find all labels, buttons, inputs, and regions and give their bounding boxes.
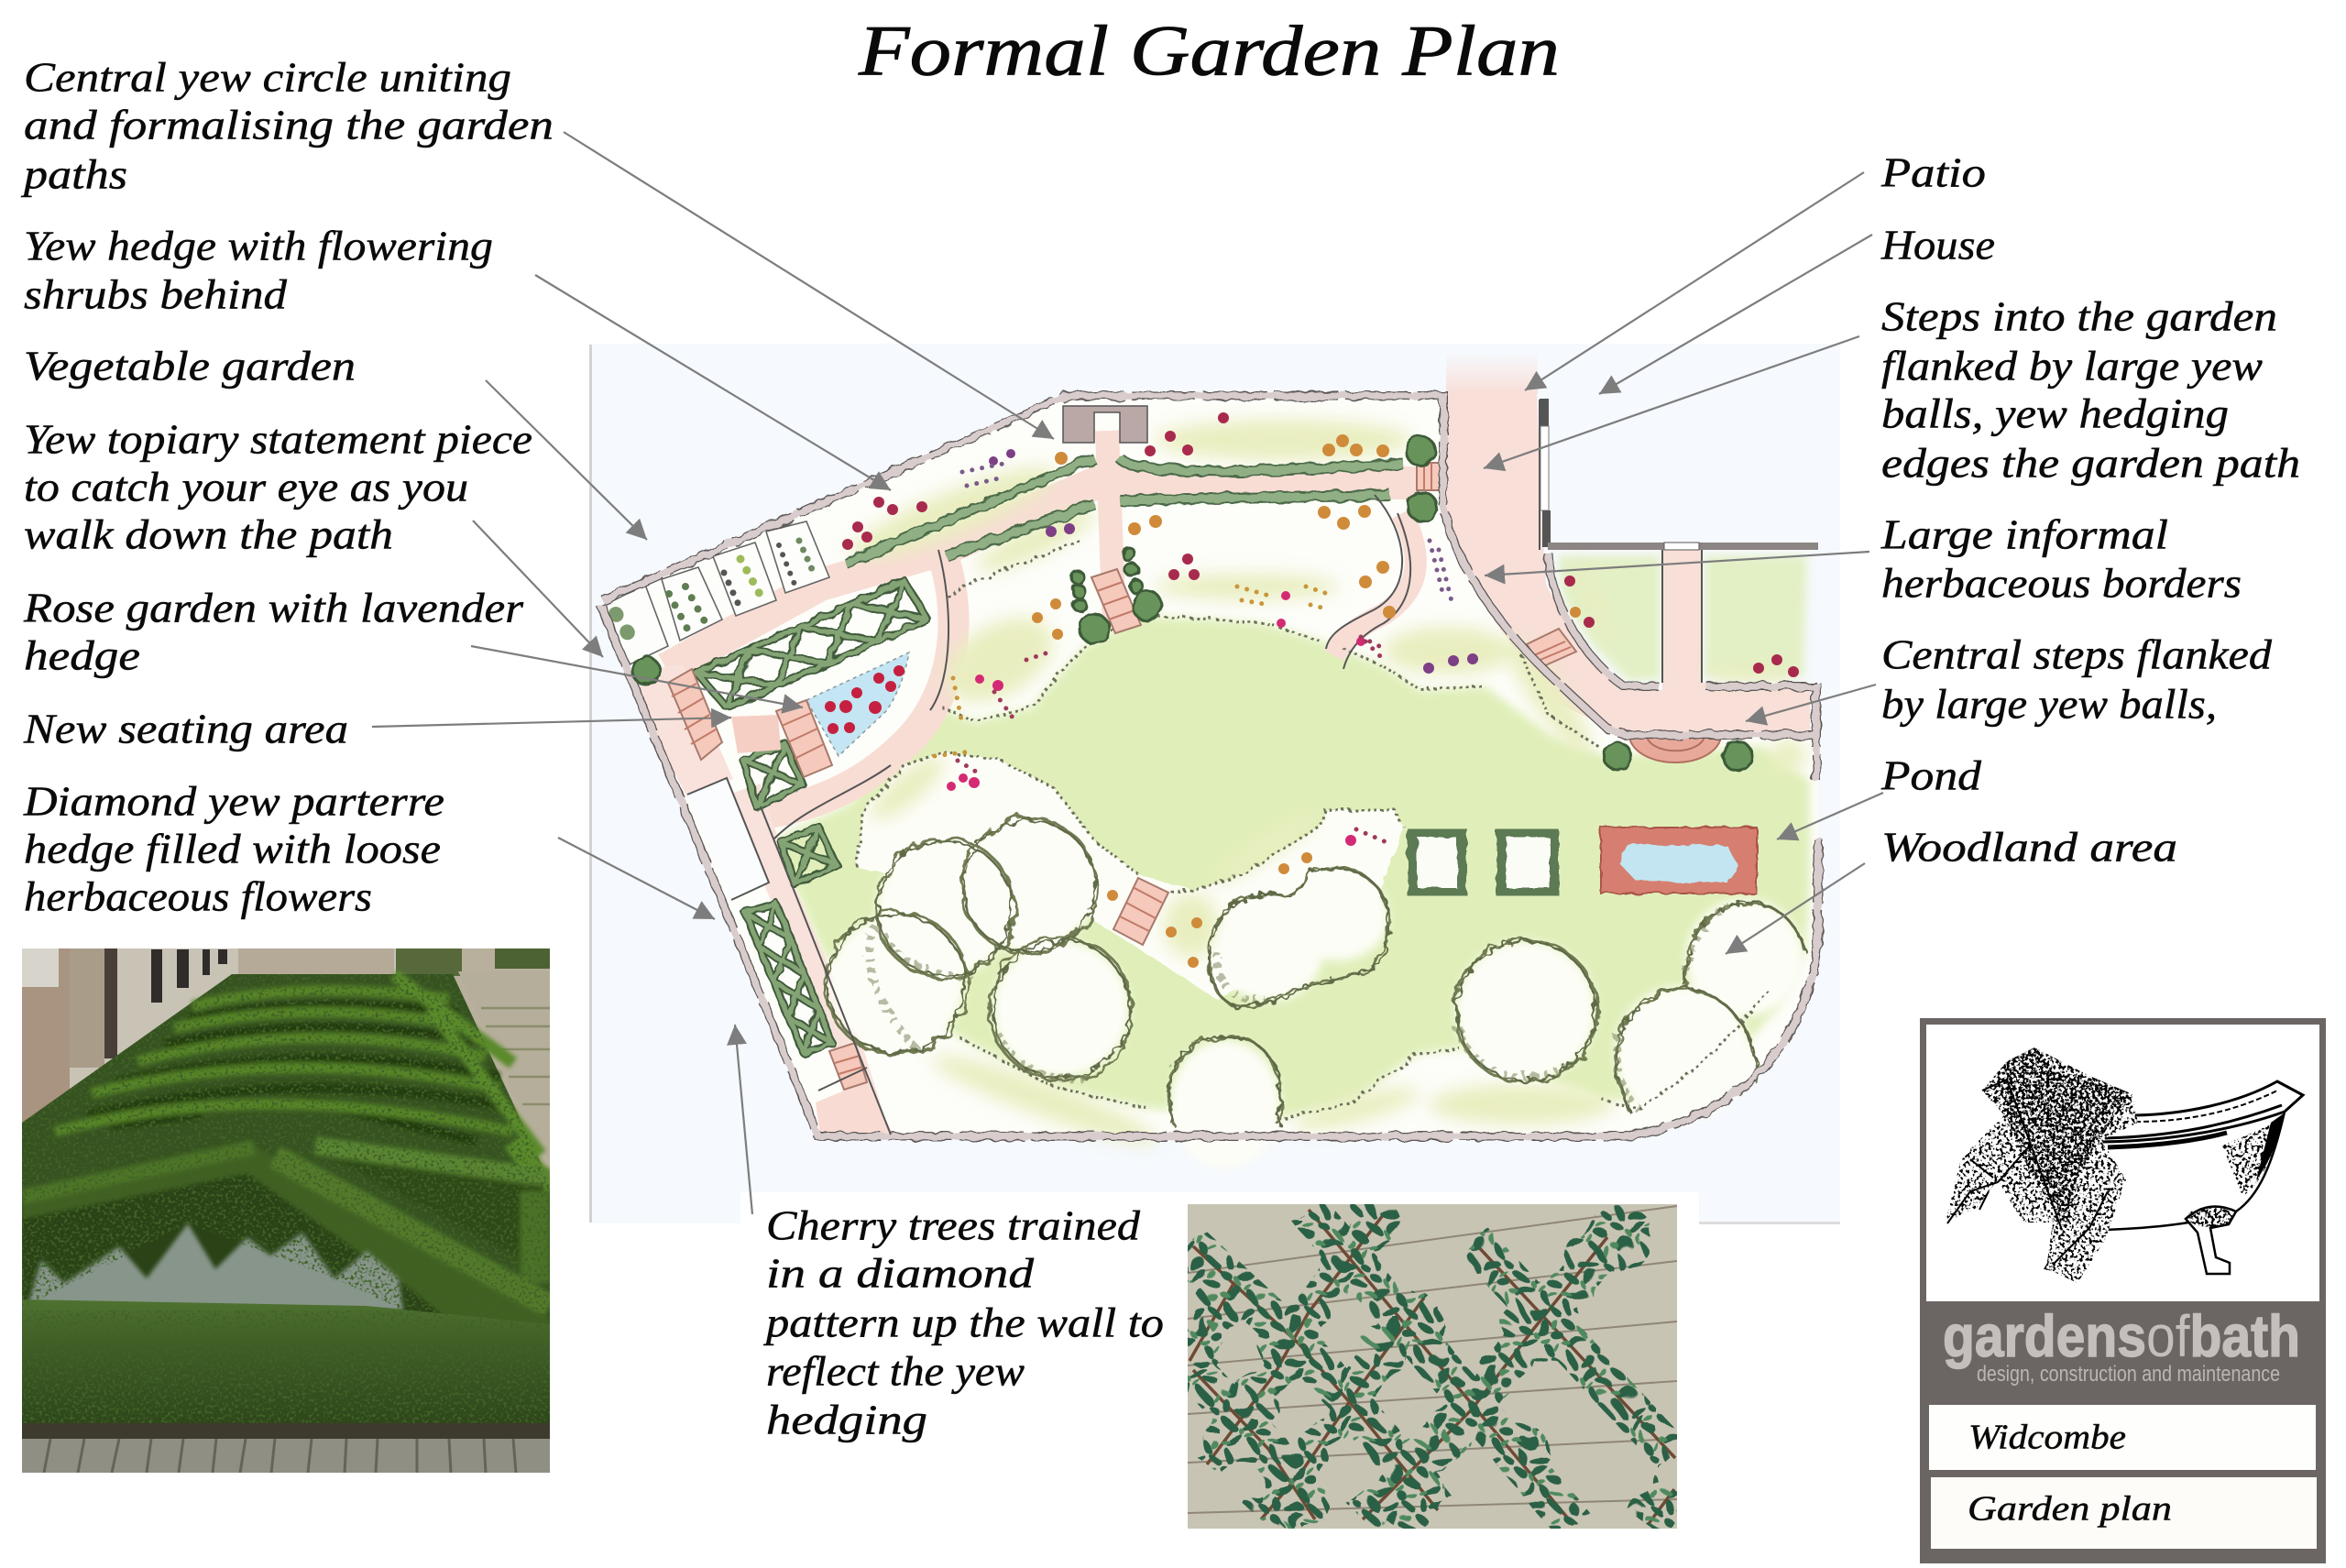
woodland trees <box>828 820 1803 1168</box>
building wall <box>70 948 396 1089</box>
text block: rose garden: Rose garden with lavender <box>23 585 524 630</box>
paving <box>458 971 462 976</box>
text block: yew topiary: Yew topiary statement piece <box>24 416 532 462</box>
text block: rose garden: hedge <box>24 632 140 678</box>
service yard <box>687 778 769 900</box>
paper background <box>590 344 1840 1223</box>
garden steps <box>668 463 1576 1090</box>
arrow: central steps <box>1746 685 1876 721</box>
text block: central steps: Central steps flanked <box>1881 630 2273 678</box>
pale planting fuzz <box>843 420 1805 1156</box>
text block: diamond yew parterre: herbaceous flowers <box>24 872 372 920</box>
pond <box>1601 828 1757 894</box>
arrow: steps into the garden <box>1484 336 1859 468</box>
photo: trained cherry trees on wall <box>1177 1198 1677 1530</box>
arrow: diamond parterre <box>558 838 715 919</box>
text block: large informal borders <box>1880 511 2242 607</box>
hedge mass <box>22 974 550 1324</box>
text block: steps into the garden: flanked by large yew <box>1881 343 2263 389</box>
yew hedges along paths <box>846 458 1403 564</box>
text block: central steps: by large yew balls, <box>1881 680 2217 728</box>
text block: steps into the garden: Steps into the garden <box>1881 293 2277 339</box>
arrow: cherry trees <box>735 1025 752 1214</box>
courtyard lawn <box>1558 555 1807 680</box>
panel: garden plan drawing <box>589 344 1840 1224</box>
panel: Gardens of Bath title block <box>1920 1018 2326 1563</box>
drawing title box: Garden plan <box>1968 1490 2172 1529</box>
arrow: central yew circle <box>564 132 1054 439</box>
arrow: house <box>1599 235 1872 394</box>
text block: yew topiary <box>24 416 532 557</box>
text block: diamond yew parterre <box>23 777 444 920</box>
hedge leaf speckle <box>22 974 550 1430</box>
west paving <box>623 664 733 797</box>
arrow: yew topiary <box>473 521 603 657</box>
patio and terrace paving <box>1446 353 1810 732</box>
bath rim <box>2101 1081 2303 1142</box>
rose garden bed <box>806 652 909 756</box>
text block: central yew circle: Central yew circle uniting <box>24 53 511 101</box>
text block: patio: Patio <box>1880 148 1986 196</box>
front hedge <box>22 1299 550 1430</box>
text block: cherry trees: Cherry trees trained <box>766 1202 1141 1248</box>
arrow: large informal borders <box>1485 552 1869 576</box>
text block: large informal borders: Large informal <box>1880 511 2168 557</box>
title: Formal Garden Plan <box>858 11 1560 90</box>
central semicircular steps <box>1629 735 1721 762</box>
arrow: patio <box>1525 172 1864 390</box>
trailing foliage <box>1946 1047 2138 1283</box>
text block: house: House <box>1880 222 1995 268</box>
text block: yew hedge: Yew hedge with flowering <box>24 222 493 269</box>
logo strapline: design, construction and maintenance <box>1977 1362 2280 1387</box>
text block: central yew circle: and formalising the garden <box>24 101 554 148</box>
tree canopy outlines <box>825 818 1807 1125</box>
diamond yew parterres <box>696 581 927 1053</box>
icon: bath with plants <box>1946 1047 2303 1283</box>
soil and cobbles <box>22 1423 550 1439</box>
arrow: rose garden <box>471 646 803 707</box>
hedge chevrons <box>55 975 550 1191</box>
new seating area <box>731 715 781 753</box>
text block: rose garden <box>23 585 524 678</box>
text block: new seating area: New seating area <box>23 706 348 751</box>
lavender planting <box>27 1223 403 1310</box>
photo: knot garden parterre <box>22 948 550 1473</box>
summerhouse at top of path <box>1063 406 1147 443</box>
planting bed scribbled edges <box>858 541 1769 1119</box>
vegetable garden beds <box>603 521 829 667</box>
gate and path edges <box>687 400 1702 1135</box>
text block: steps into the garden: edges the garden path <box>1881 440 2300 486</box>
project name box <box>1929 1405 2316 1470</box>
yew balls <box>632 436 1752 771</box>
text block: cherry trees: hedging <box>766 1397 927 1442</box>
south-west paving <box>816 1081 893 1136</box>
logo wordmark: gardensofbath <box>1943 1303 2300 1369</box>
project name box: Widcombe <box>1968 1419 2126 1457</box>
text block: yew topiary: walk down the path <box>24 511 393 557</box>
weatherboard lines <box>1188 1206 1677 1513</box>
arrow: new seating area <box>372 718 731 727</box>
garden walls <box>601 396 1818 1136</box>
main triangular hedge <box>22 1135 550 1323</box>
text block: central steps <box>1881 630 2273 728</box>
text block: pond: Pond <box>1880 751 1982 799</box>
arrow: yew hedge <box>535 275 891 490</box>
text block: steps into the garden <box>1881 293 2300 486</box>
text block: vegetable garden: Vegetable garden <box>24 343 356 389</box>
arrow: vegetable garden <box>486 380 647 540</box>
garden interior <box>601 396 1818 1139</box>
leaf bands <box>1189 1210 1675 1525</box>
ivy strands <box>1947 1080 2108 1265</box>
text block: large informal borders: herbaceous borders <box>1881 559 2242 607</box>
text block: central yew circle: paths <box>21 150 127 198</box>
text block: yew hedge: shrubs behind <box>24 271 288 317</box>
left claw foot <box>2045 1255 2080 1272</box>
square clipped hedges <box>1412 832 1554 893</box>
text block: cherry trees: in a diamond <box>766 1250 1035 1296</box>
bath body <box>2101 1112 2285 1230</box>
drawing title box <box>1931 1477 2317 1549</box>
house wall <box>1540 399 1818 550</box>
text block: diamond yew parterre: Diamond yew parterre <box>23 777 444 825</box>
right claw foot <box>2186 1207 2236 1274</box>
text block: diamond yew parterre: hedge filled with loose <box>24 825 441 872</box>
text block: woodland area: Woodland area <box>1881 823 2177 871</box>
text block: cherry trees <box>763 1202 1164 1442</box>
denser leaf groups at crossings <box>1177 1198 1653 1530</box>
arrow: woodland area <box>1726 863 1865 954</box>
text block: yew topiary: to catch your eye as you <box>24 464 468 510</box>
flowers <box>825 412 1799 968</box>
stems <box>1189 1210 1675 1525</box>
arrow: pond <box>1777 793 1883 839</box>
text block: cherry trees: pattern up the wall to <box>763 1299 1164 1345</box>
white planting beds <box>858 752 1403 1000</box>
main lawn <box>773 616 1810 1119</box>
text block: cherry trees: reflect the yew <box>766 1347 1025 1395</box>
gravel paths <box>666 431 1416 1118</box>
text block: yew hedge <box>24 222 493 317</box>
text block: central yew circle <box>21 53 554 198</box>
text block: steps into the garden: balls, yew hedging <box>1881 390 2229 436</box>
